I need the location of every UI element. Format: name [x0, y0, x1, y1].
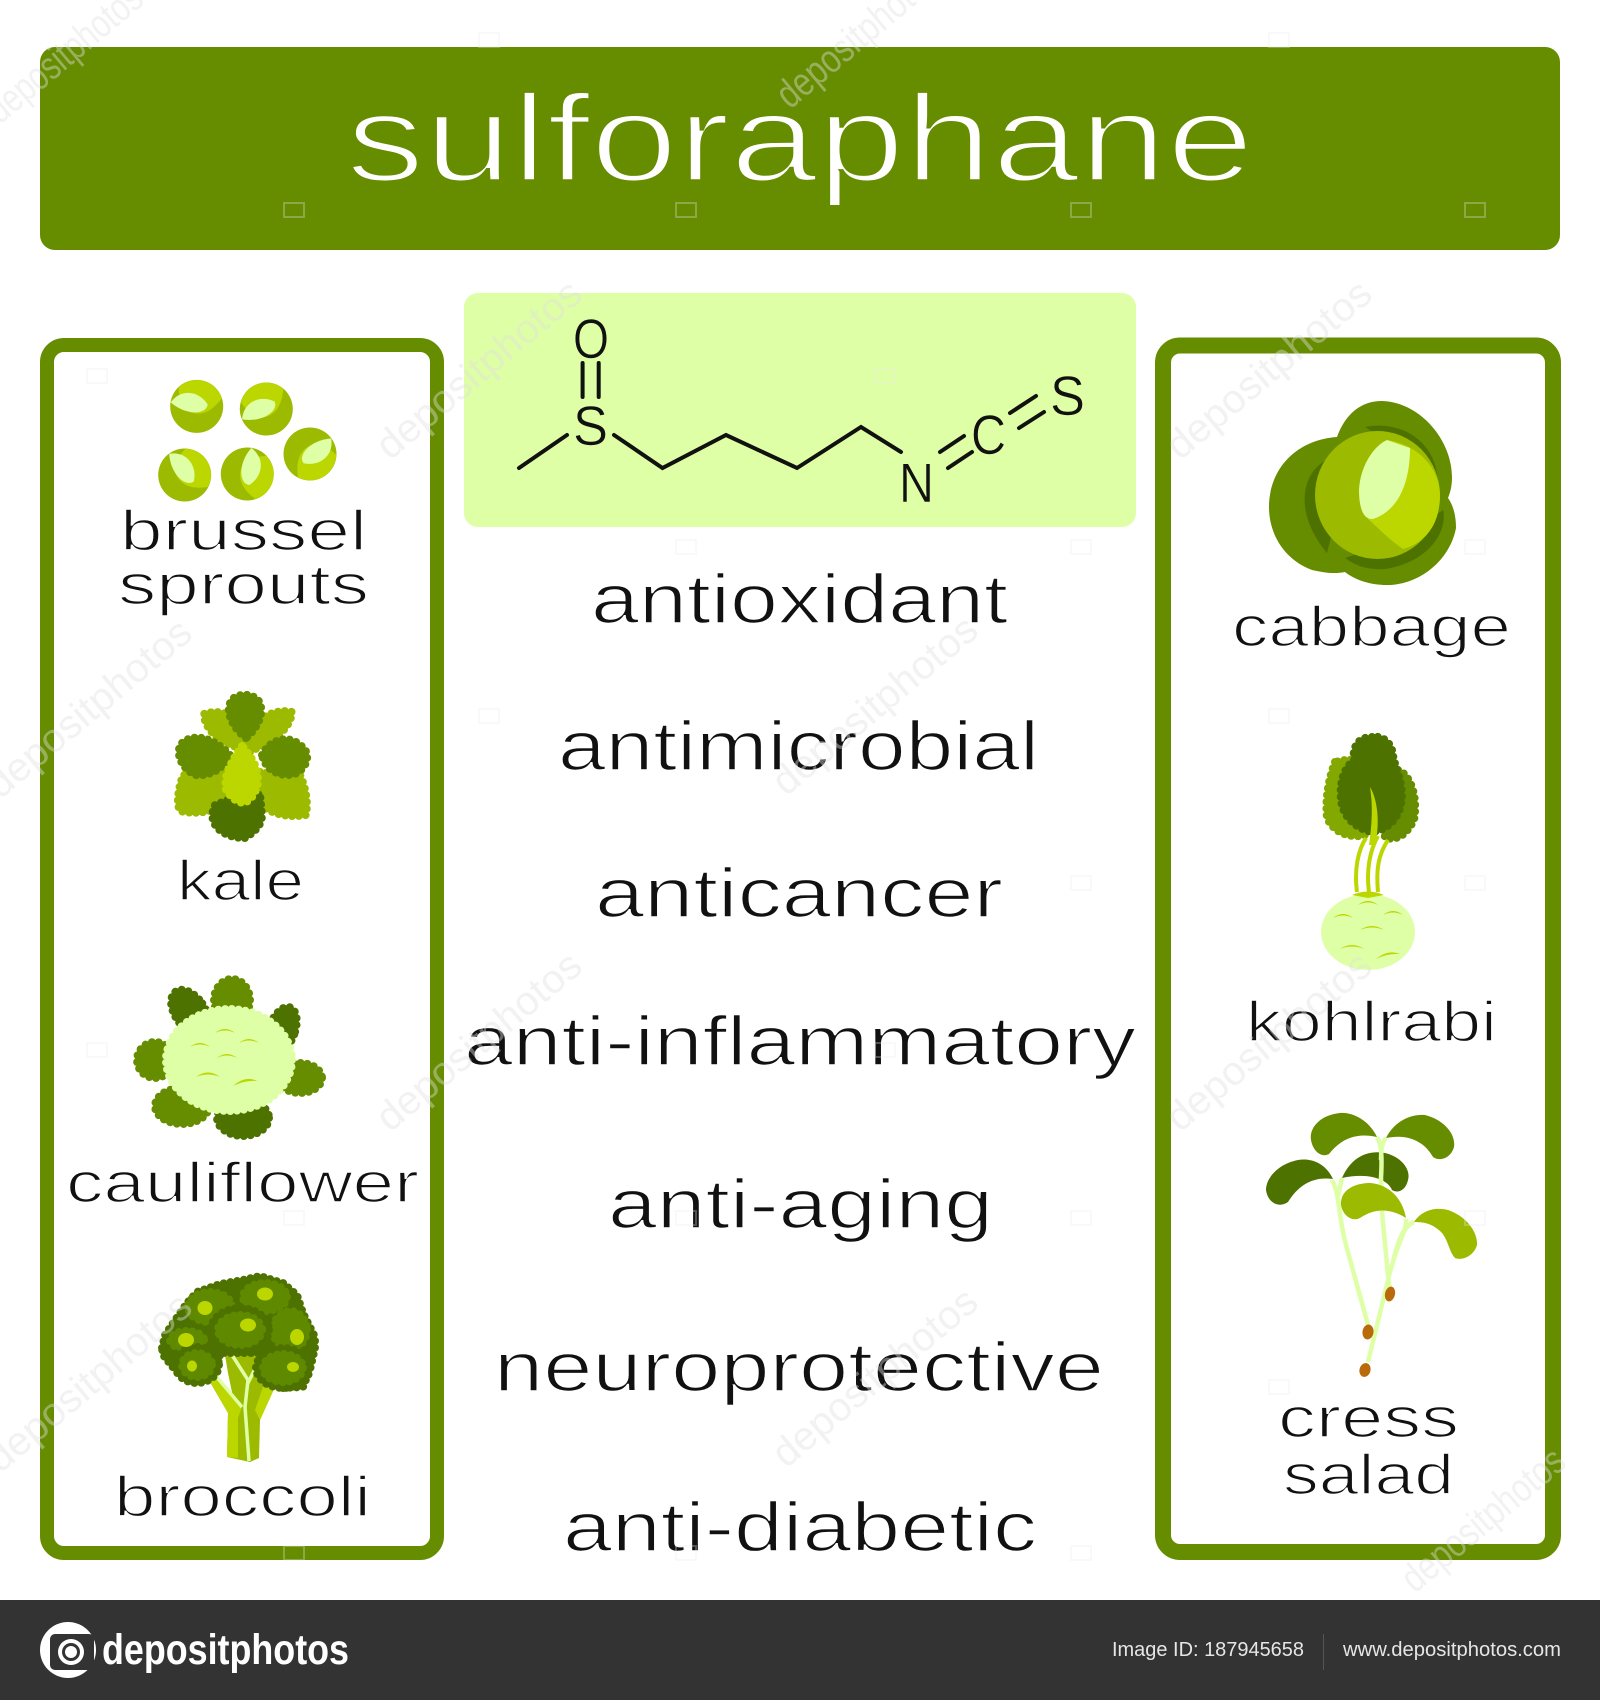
property: anticancer: anticancer: [595, 854, 1003, 932]
molecule atoms: S: [573, 394, 608, 457]
watermark overlay: depositphotos: [368, 943, 590, 1140]
icon: cress salad: [1266, 1113, 1477, 1378]
label: kohlrabi: kohlrabi: [1246, 990, 1497, 1054]
label: kale: kale: [177, 849, 304, 913]
label: cress salad: cress: [1278, 1386, 1459, 1450]
icon: depositphotos logo: [40, 1622, 96, 1678]
property: antimicrobial: antimicrobial: [558, 707, 1039, 785]
property: anti-inflammatory: anti-inflammatory: [464, 1002, 1136, 1080]
title banner: [40, 47, 1560, 250]
watermark overlay: depositphotos: [764, 607, 986, 804]
logo wordmark: depositphotos: [102, 1626, 349, 1674]
icon: kale: [178, 695, 307, 838]
list: health properties: [464, 560, 1136, 1566]
watermark overlay: depositphotos: [1158, 943, 1380, 1140]
icon: cauliflower: [137, 979, 322, 1136]
molecule atoms: [573, 307, 1085, 514]
watermark overlay: depositphotos: [764, 1279, 986, 1476]
label: brussel sprouts: sprouts: [118, 553, 369, 617]
panel: molecule structure: [464, 293, 1136, 527]
molecule atoms: S: [1050, 364, 1085, 427]
label: brussel sprouts: [118, 499, 369, 617]
label: cauliflower: cauliflower: [66, 1151, 419, 1215]
label: broccoli: broccoli: [114, 1465, 371, 1529]
icon: cabbage: [1269, 401, 1456, 585]
molecule atoms: N: [899, 451, 934, 514]
footer bar: [0, 1600, 1600, 1700]
property: neuroprotective: neuroprotective: [494, 1328, 1104, 1406]
property: anti-aging: anti-aging: [608, 1165, 993, 1243]
property: antioxidant: antioxidant: [591, 560, 1008, 638]
panel: right vegetables: [1163, 346, 1553, 1552]
molecule atoms: C: [971, 403, 1006, 466]
label: cabbage: cabbage: [1232, 595, 1511, 659]
molecule atoms: O: [573, 307, 609, 370]
website: www.depositphotos.com: [1342, 1639, 1561, 1661]
molecule bonds: [519, 363, 1044, 468]
title text: sulforaphane: [346, 70, 1254, 208]
panel: left vegetables: [47, 345, 437, 1553]
watermark overlay: depositphotos: [1158, 271, 1380, 468]
label: cress salad: [1278, 1386, 1459, 1507]
label: brussel sprouts: brussel: [120, 499, 367, 563]
image id: Image ID: 187945658: [1112, 1639, 1304, 1661]
watermark overlay: depositphotos: [368, 271, 590, 468]
icon: brussel sprouts: [147, 372, 347, 512]
icon: broccoli: [162, 1276, 315, 1462]
icon: kohlrabi: [1321, 737, 1415, 970]
property: anti-diabetic: anti-diabetic: [563, 1488, 1037, 1566]
label: cress salad: salad: [1283, 1443, 1454, 1507]
